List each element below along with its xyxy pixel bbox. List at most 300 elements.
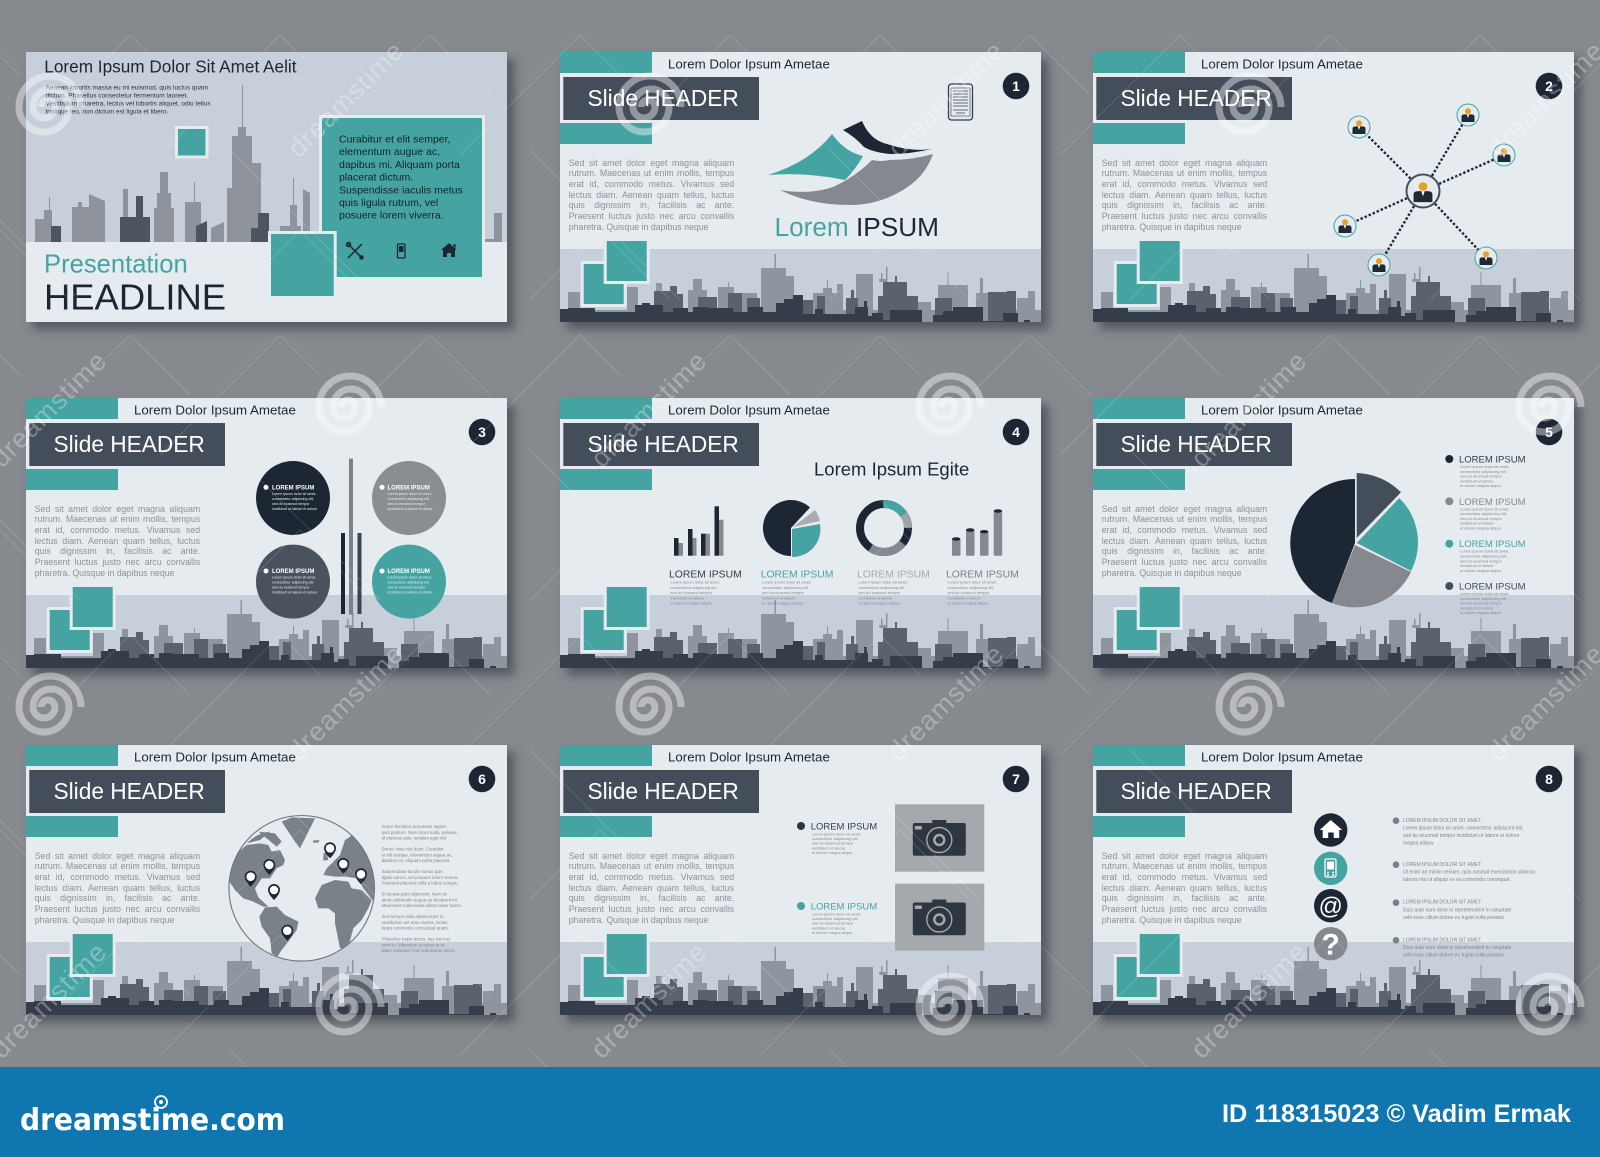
caption: bottom: et dolore magna aliqua bbox=[812, 930, 853, 935]
decorative squares bbox=[582, 932, 648, 998]
slide header bbox=[28, 768, 226, 814]
logo wordmark: Lorem IPSUM bbox=[774, 212, 939, 242]
legend: dark: Lorem ipsum dolor sit amet, bbox=[1460, 464, 1509, 469]
column: teal label: incididunt ut labore bbox=[762, 595, 796, 600]
sky band bbox=[560, 595, 1041, 668]
body text: erat id, commodo metus. Vivamus sed bbox=[569, 872, 734, 882]
slide header: Slide HEADER bbox=[588, 778, 739, 804]
body text bbox=[35, 851, 200, 925]
icon: question mark bbox=[1314, 927, 1347, 962]
list item 4: LOREM IPSUM DOLOR SIT AMET bbox=[1403, 938, 1481, 944]
watermark overlay: dreamstime bbox=[585, 937, 712, 1064]
decorative squares bbox=[1115, 932, 1181, 998]
sky band bbox=[26, 595, 507, 668]
caption: top: incididunt ut labore bbox=[812, 845, 846, 850]
caption: bottom: LOREM IPSUM bbox=[811, 902, 877, 912]
sky band bbox=[1093, 249, 1574, 322]
body text: rutrum. Maecenas ut enim mollis, tempus bbox=[35, 514, 200, 524]
legend: teal: consectetur adipiscing elit, bbox=[1460, 554, 1507, 558]
circle: bottom left bbox=[256, 545, 330, 619]
body text: rutrum. Maecenas ut enim mollis, tempus bbox=[569, 861, 734, 871]
body text: lectus diam. Aenean quam tellus, luctus bbox=[1102, 190, 1267, 200]
header bars bbox=[1093, 745, 1185, 837]
skyline bbox=[560, 254, 1041, 334]
legend: slate: consectetur adipiscing elit, bbox=[1460, 596, 1507, 601]
watermark overlay: dreamstime bbox=[882, 36, 1009, 163]
watermark overlay: dreamstime bbox=[282, 36, 409, 163]
body text: Sed sit amet dolor eget magna aliquam bbox=[569, 851, 734, 861]
header bars bbox=[26, 398, 118, 490]
slide header bbox=[562, 76, 760, 122]
body text: pharetra. Quisque in dapibus neque bbox=[569, 222, 709, 232]
title skyline bbox=[35, 85, 502, 242]
skyline bbox=[26, 947, 507, 1027]
column: light label: incididunt ut labore bbox=[858, 595, 893, 600]
body text: quis dignissim in, facilisis ac ante. bbox=[1102, 546, 1267, 556]
panel text: Curabitur et elit semper, bbox=[339, 134, 450, 146]
page number bbox=[1536, 73, 1562, 99]
list item 2: LOREM IPSUM DOLOR SIT AMET bbox=[1403, 862, 1481, 868]
decorative squares bbox=[48, 932, 114, 998]
body text: pharetra. Quisque in dapibus neque bbox=[569, 915, 709, 925]
legend: slate: Lorem ipsum dolor sit amet, bbox=[1460, 591, 1509, 596]
panel text bbox=[339, 134, 463, 222]
legend: dark: et dolore magna aliqua bbox=[1460, 483, 1501, 488]
legend: grey: et dolore magna aliqua bbox=[1460, 526, 1501, 530]
body text: pharetra. Quisque in dapibus neque bbox=[1102, 568, 1242, 578]
panel: slide 1 bbox=[560, 52, 1041, 322]
page number: 4 bbox=[1012, 424, 1020, 440]
circle: bottom left: Lorem ipsum dolor sit amet, bbox=[272, 576, 316, 580]
circle: top left: consectetur adipiscing elit, bbox=[272, 497, 314, 501]
legend: slate: LOREM IPSUM bbox=[1459, 582, 1526, 592]
skyline bbox=[26, 600, 507, 680]
body text: erat id, commodo metus. Vivamus sed bbox=[1102, 525, 1267, 535]
column: grey label: et dolore magna aliqua bbox=[948, 601, 989, 606]
slide header: Slide HEADER bbox=[54, 431, 205, 457]
body text: lectus diam. Aenean quam tellus, luctus bbox=[1102, 536, 1267, 546]
text column: ligula rutrum, vel posuere lorem viverra. bbox=[382, 875, 459, 880]
body text: quis dignissim in, facilisis ac ante. bbox=[1102, 893, 1267, 903]
page number: 3 bbox=[478, 424, 486, 440]
body text: rutrum. Maecenas ut enim mollis, tempus bbox=[569, 168, 734, 178]
circle: bottom left: LOREM IPSUM bbox=[272, 569, 314, 575]
slide header bbox=[562, 768, 760, 814]
watermark overlay: dreamstime bbox=[1185, 937, 1312, 1064]
subtitle: Lorem Dolor Ipsum Ametae bbox=[1201, 57, 1363, 72]
legend: slate: incididunt ut labore bbox=[1460, 605, 1494, 610]
list item 1: Lorem ipsum dolor sit amet, consectetur adipiscint elit, bbox=[1403, 825, 1523, 831]
header bars bbox=[560, 745, 652, 837]
panel text: posuere lorem viverra. bbox=[339, 210, 443, 222]
subtitle: Lorem Dolor Ipsum Ametae bbox=[134, 750, 296, 765]
circle: bottom right: incididunt ut labore et dolore bbox=[388, 591, 433, 595]
text column: enim in, bibendum posuere arcu. bbox=[382, 942, 446, 947]
sky band bbox=[560, 942, 1041, 1015]
body text: Praesent luctus justo nec arcu convallis bbox=[1102, 557, 1267, 567]
legend: dark: sed do eiusmod tempor bbox=[1460, 474, 1502, 479]
slide header bbox=[28, 422, 226, 468]
intro text: Vestibulum pharetra, lectus vel lobortis aliquet, odio tellus bbox=[46, 100, 211, 108]
list item 2: laboris nisi ut aliquip ex ea commodo consequat. bbox=[1403, 877, 1511, 883]
large teal square bbox=[270, 232, 335, 298]
panel: slide 5 bbox=[1093, 398, 1574, 668]
body text: erat id, commodo metus. Vivamus sed bbox=[35, 525, 200, 535]
caption: bottom: consectetur adipiscing elit, bbox=[812, 916, 859, 921]
circle: bottom right: sed do eiusmod tempor bbox=[388, 586, 426, 590]
text column: Phasellus turpis lectus, hac trent at bbox=[382, 937, 450, 942]
icon: tools bbox=[346, 242, 363, 259]
sky background band bbox=[26, 52, 507, 242]
slide header: Slide HEADER bbox=[54, 778, 205, 804]
column: grey label: consectetur adipiscing elit, bbox=[948, 585, 994, 590]
body text: quis dignissim in, facilisis ac ante. bbox=[569, 200, 734, 210]
panel: title slide bbox=[26, 52, 507, 322]
legend: teal: LOREM IPSUM bbox=[1459, 539, 1526, 550]
column: light label: sed do eiusmod tempor bbox=[858, 590, 901, 595]
page number: 6 bbox=[478, 771, 486, 787]
sky band bbox=[560, 249, 1041, 322]
circle: bottom left: sed do eiusmod tempor bbox=[272, 586, 310, 590]
legend: dark bbox=[1445, 454, 1526, 488]
body text bbox=[569, 158, 734, 232]
list item 1: LOREM IPSUM DOLOR SIT AMET bbox=[1403, 818, 1481, 824]
body text: Sed sit amet dolor eget magna aliquam bbox=[1102, 851, 1267, 861]
watermark overlay: dreamstime bbox=[282, 639, 409, 766]
text column: id placerat quis, sodales eget nisl. bbox=[382, 836, 448, 841]
icon: phone bbox=[398, 244, 405, 258]
list item 4: Duis aute irure dolor in reprehenderit in voluptate bbox=[1403, 945, 1512, 951]
image placeholder: bottom bbox=[895, 884, 984, 951]
body text: rutrum. Maecenas ut enim mollis, tempus bbox=[1102, 861, 1267, 871]
panel: slide 4 bbox=[560, 398, 1041, 668]
globe bbox=[229, 816, 377, 961]
body text: Praesent luctus justo nec arcu convallis bbox=[35, 557, 200, 567]
header bars bbox=[1093, 52, 1185, 144]
caption: bottom: sed do eiusmod tempor bbox=[812, 921, 854, 926]
body text bbox=[35, 504, 200, 578]
text column: Praesent placerat nulla a lobus congue. bbox=[382, 881, 459, 886]
map pins bbox=[245, 842, 367, 941]
text column: Maecenas malesuada ullamcorper lorem. bbox=[382, 903, 462, 908]
list item 1: sed do eiusmod tempor incididunt ut labore et dolore bbox=[1403, 833, 1520, 839]
subtitle: Lorem Dolor Ipsum Ametae bbox=[668, 750, 830, 765]
column: teal label bbox=[761, 569, 833, 606]
circle: top right: Lorem ipsum dolor sit amet, bbox=[388, 492, 432, 496]
body text: erat id, commodo metus. Vivamus sed bbox=[1102, 872, 1267, 882]
circle: bottom left: incididunt ut labore et dolore bbox=[272, 591, 317, 595]
caption: top: Lorem ipsum dolor sit amet, bbox=[812, 831, 861, 836]
column: dark label: incididunt ut labore bbox=[670, 595, 705, 600]
watermark overlay: dreamstime bbox=[1185, 346, 1312, 473]
page number bbox=[1003, 766, 1029, 792]
column: light label bbox=[857, 569, 930, 606]
circle: top right: LOREM IPSUM bbox=[388, 486, 430, 492]
slide header bbox=[1095, 768, 1294, 814]
text column: Et lacinia justo dignissim. Nam sit bbox=[382, 892, 448, 897]
body text: Praesent luctus justo nec arcu convallis bbox=[569, 904, 734, 914]
panel text: elementum augue ac, bbox=[339, 146, 440, 158]
intro text: dictum. Phasellus consectetur fermentum laoreet. bbox=[46, 92, 188, 100]
slide header: Slide HEADER bbox=[1120, 85, 1272, 111]
legend: grey: sed do eiusmod tempor bbox=[1460, 516, 1502, 521]
sky band bbox=[26, 942, 507, 1015]
headline: HEADLINE bbox=[44, 276, 226, 317]
body text: pharetra. Quisque in dapibus neque bbox=[1102, 222, 1242, 232]
body text: erat id, commodo metus. Vivamus sed bbox=[35, 872, 200, 882]
body text: Sed sit amet dolor eget magna aliquam bbox=[35, 504, 200, 514]
column: dark label: Lorem ipsum dolor sit amet, bbox=[670, 580, 720, 584]
cylinder chart bbox=[952, 509, 1002, 556]
legend: slate: sed do eiusmod tempor bbox=[1460, 601, 1502, 606]
bar chart bbox=[674, 506, 724, 556]
body text: pharetra. Quisque in dapibus neque bbox=[35, 915, 175, 925]
list item 3: Duis aute irure dolor in reprehenderit in voluptate bbox=[1403, 907, 1512, 913]
body text: lectus diam. Aenean quam tellus, luctus bbox=[569, 190, 734, 200]
slide header: Slide HEADER bbox=[1120, 778, 1272, 804]
title text: Lorem Ipsum Dolor Sit Amet Aelit bbox=[44, 57, 297, 77]
page number bbox=[469, 766, 495, 792]
body text bbox=[1102, 851, 1267, 925]
legend: dark: incididunt ut labore bbox=[1460, 478, 1494, 483]
panel: slide 3 bbox=[26, 398, 507, 668]
subtitle: Lorem Dolor Ipsum Ametae bbox=[134, 403, 296, 418]
header bars bbox=[560, 52, 652, 144]
circle: top left: Lorem ipsum dolor sit amet, bbox=[272, 492, 316, 496]
list item 1 bbox=[1393, 817, 1523, 846]
circle: top left: LOREM IPSUM bbox=[272, 486, 314, 492]
legend: teal: sed do eiusmod tempor bbox=[1460, 558, 1502, 563]
skyline bbox=[560, 947, 1041, 1027]
slide header bbox=[1095, 422, 1294, 468]
icon: at sign bbox=[1314, 889, 1347, 922]
chart heading: Lorem Ipsum Egite bbox=[814, 459, 969, 480]
list item 3: LOREM IPSUM DOLOR SIT AMET bbox=[1403, 900, 1481, 906]
circle: top right: incididunt ut labore et dolore bbox=[388, 507, 433, 511]
body text: pharetra. Quisque in dapibus neque bbox=[35, 568, 175, 578]
list item 2: Ut enim ad minim veniam, quis nostrud exercitation ullamco bbox=[1403, 869, 1535, 875]
icon: at sign: @ bbox=[1319, 893, 1343, 920]
page number: 5 bbox=[1545, 424, 1553, 440]
caption: top: consectetur adipiscing elit, bbox=[812, 836, 859, 841]
column: grey label: incididunt ut labore bbox=[948, 595, 982, 600]
slide header: Slide HEADER bbox=[588, 85, 739, 111]
column: light label: Lorem ipsum dolor sit amet, bbox=[858, 580, 908, 584]
watermark overlay: dreamstime bbox=[585, 346, 712, 473]
column: dark label: consectetur adipiscing elit, bbox=[670, 585, 717, 590]
circle: top right: consectetur adipiscing elit, bbox=[388, 497, 430, 501]
body text: lectus diam. Aenean quam tellus, luctus bbox=[35, 536, 200, 546]
body text: erat id, commodo metus. Vivamus sed bbox=[569, 179, 734, 189]
body text bbox=[1102, 504, 1267, 578]
footer bar bbox=[0, 1067, 1600, 1157]
panel text: Suspendisse iaculis metus bbox=[339, 184, 463, 196]
column: teal label: Lorem ipsum dolor sit amet, bbox=[762, 580, 811, 584]
subtitle: Lorem Dolor Ipsum Ametae bbox=[668, 403, 830, 418]
watermark overlay: dreamstime bbox=[882, 639, 1009, 766]
column: grey label bbox=[946, 569, 1019, 606]
text column: dapibus mi. Aliquam porta placerat. bbox=[382, 858, 450, 863]
text column: Donec vitae nisi dolor. Curabitur bbox=[382, 847, 444, 852]
body text: lectus diam. Aenean quam tellus, luctus bbox=[35, 883, 200, 893]
slide header: Slide HEADER bbox=[1120, 431, 1272, 457]
body text: Praesent luctus justo nec arcu convallis bbox=[569, 211, 734, 221]
body text: Sed sit amet dolor eget magna aliquam bbox=[1102, 504, 1267, 514]
intro text: Aenean lobortis massa eu mi euismod, quis luctus quam bbox=[46, 84, 208, 92]
body text bbox=[569, 851, 734, 925]
icon: phone bbox=[1314, 852, 1347, 885]
circle: bottom right bbox=[372, 545, 446, 619]
circle: top left bbox=[256, 461, 330, 535]
text column: Sed tempor nulla ullamcorper in bbox=[382, 914, 444, 919]
skyline bbox=[1093, 600, 1574, 680]
text column: amet sollicitudin augue eu hendrerit mi. bbox=[382, 897, 458, 902]
list item 1: magna aliqua. bbox=[1403, 840, 1434, 846]
legend: dark: LOREM IPSUM bbox=[1459, 454, 1526, 466]
column: light label: consectetur adipiscing elit, bbox=[858, 585, 905, 590]
body text: rutrum. Maecenas ut enim mollis, tempus bbox=[35, 861, 200, 871]
page number: 8 bbox=[1545, 771, 1553, 787]
column: light label: LOREM IPSUM bbox=[857, 569, 930, 580]
header bars bbox=[1093, 398, 1185, 490]
list item 3 bbox=[1393, 899, 1512, 921]
subtitle: Lorem Dolor Ipsum Ametae bbox=[1201, 403, 1363, 418]
legend: slate bbox=[1445, 582, 1526, 615]
circle: bottom right: Lorem ipsum dolor sit amet, bbox=[388, 576, 432, 580]
icon: home bbox=[1314, 813, 1347, 847]
legend: dark: consectetur adipiscing elit, bbox=[1460, 469, 1507, 474]
body text: Sed sit amet dolor eget magna aliquam bbox=[35, 851, 200, 861]
body text: quis dignissim in, facilisis ac ante. bbox=[1102, 200, 1267, 210]
column: teal label: sed do eiusmod tempor bbox=[762, 590, 804, 595]
list item 3: velit esse cillum dolore eu fugiat nulla pariatur. bbox=[1403, 915, 1505, 921]
circle: bottom left: consectetur adipiscing elit, bbox=[272, 581, 314, 585]
header bars bbox=[26, 745, 118, 837]
icon: tablet bbox=[948, 84, 972, 120]
text column: turpis commodo, consequat quam. bbox=[382, 926, 449, 931]
sky band bbox=[1093, 942, 1574, 1015]
decorative squares bbox=[582, 586, 648, 652]
body text: quis dignissim in, facilisis ac ante. bbox=[35, 546, 200, 556]
page number bbox=[1536, 766, 1562, 792]
page number bbox=[1536, 419, 1562, 445]
page number: 2 bbox=[1545, 78, 1553, 94]
caption: top: et dolore magna aliqua bbox=[812, 850, 853, 855]
decorative squares bbox=[1115, 240, 1181, 306]
body text: Sed sit amet dolor eget magna aliquam bbox=[1102, 158, 1267, 168]
panel: slide 7 bbox=[560, 745, 1041, 1015]
page number bbox=[1003, 73, 1029, 99]
column: dark label: sed do eiusmod tempor bbox=[670, 590, 713, 595]
footer logo: dreamstime.com bbox=[20, 1103, 285, 1138]
body text: Praesent luctus justo nec arcu convallis bbox=[35, 904, 200, 914]
panel text: placerat dictum. bbox=[339, 172, 413, 184]
legend: teal: Lorem ipsum dolor sit amet, bbox=[1460, 549, 1509, 554]
slide header: Slide HEADER bbox=[588, 431, 739, 457]
text column: et elit semper, elementum augue ac, bbox=[382, 852, 452, 857]
network diagram bbox=[1334, 104, 1515, 276]
small teal square bbox=[176, 128, 207, 157]
text column: Diam euismod, felis sed dictum lacus. bbox=[382, 948, 455, 953]
slide header bbox=[1095, 76, 1294, 122]
caption: top bbox=[797, 822, 877, 855]
body text: Sed sit amet dolor eget magna aliquam bbox=[569, 158, 734, 168]
image placeholder: top bbox=[895, 804, 984, 872]
circle: bottom right: consectetur adipiscing elit, bbox=[388, 581, 430, 585]
body text: rutrum. Maecenas ut enim mollis, tempus bbox=[1102, 514, 1267, 524]
body text: Praesent luctus justo nec arcu convallis bbox=[1102, 211, 1267, 221]
body text: lectus diam. Aenean quam tellus, luctus bbox=[569, 883, 734, 893]
column: dark label: LOREM IPSUM bbox=[669, 569, 742, 580]
list item 2 bbox=[1393, 861, 1535, 883]
column: grey label: sed do eiusmod tempor bbox=[948, 590, 990, 595]
panel text: dapibus mi. Aliquam porta bbox=[339, 159, 460, 171]
panel: slide 8 bbox=[1093, 745, 1574, 1015]
icon: question mark: ? bbox=[1322, 928, 1340, 962]
caption: top: LOREM IPSUM bbox=[811, 822, 877, 832]
page number: 7 bbox=[1012, 771, 1020, 787]
body text: pharetra. Quisque in dapibus neque bbox=[1102, 915, 1242, 925]
column: teal label: et dolore magna aliqua bbox=[762, 601, 803, 606]
circle: top left: incididunt ut labore et dolore bbox=[272, 507, 317, 511]
circle: top right: sed do eiusmod tempor bbox=[388, 502, 426, 506]
legend: grey: incididunt ut labore bbox=[1460, 521, 1494, 526]
list item 4: velit esse cillum dolore eu fugiat nulla pariatur. bbox=[1403, 952, 1505, 958]
intro text: tristique leo, non dictum est ligula et libero. bbox=[46, 108, 169, 116]
column: dark label: et dolore magna aliqua bbox=[670, 601, 712, 606]
legend: slate: et dolore magna aliqua bbox=[1460, 610, 1501, 615]
skyline bbox=[560, 600, 1041, 680]
body text: rutrum. Maecenas ut enim mollis, tempus bbox=[1102, 168, 1267, 178]
skyline bbox=[1093, 254, 1574, 334]
header bars bbox=[560, 398, 652, 490]
body text: quis dignissim in, facilisis ac ante. bbox=[35, 893, 200, 903]
footer credit: ID 118315023 © Vadim Ermak bbox=[1222, 1100, 1571, 1128]
circle: top right bbox=[372, 461, 446, 535]
column: dark label bbox=[669, 569, 742, 606]
headline accent: Presentation bbox=[44, 250, 188, 278]
body text: Praesent luctus justo nec arcu convallis bbox=[1102, 904, 1267, 914]
caption: bottom: Lorem ipsum dolor sit amet, bbox=[812, 911, 861, 916]
column: grey label: Lorem ipsum dolor sit amet, bbox=[948, 580, 997, 584]
body text bbox=[1102, 158, 1267, 232]
donut chart bbox=[860, 504, 908, 552]
text column: quis pretium. Nam lacus nulla, pulvinar bbox=[382, 830, 458, 835]
column: teal label: consectetur adipiscing elit, bbox=[762, 585, 809, 590]
caption: bottom bbox=[797, 902, 877, 935]
pie chart bbox=[763, 500, 820, 557]
circle: top left: sed do eiusmod tempor bbox=[272, 502, 310, 506]
legend: teal: incididunt ut labore bbox=[1460, 563, 1494, 568]
slide header bbox=[562, 422, 760, 468]
column: light label: et dolore magna aliqua bbox=[858, 601, 900, 606]
skyline bbox=[1093, 947, 1574, 1027]
text column: Suspendisse iaculis metus quis bbox=[382, 869, 443, 874]
logo mark bbox=[768, 121, 933, 205]
legend: teal bbox=[1445, 539, 1526, 573]
panel: slide 6 bbox=[26, 745, 507, 1015]
text column: vestibulum vel ante viverra, luctus bbox=[382, 920, 448, 925]
page number bbox=[469, 419, 495, 445]
body text: erat id, commodo metus. Vivamus sed bbox=[1102, 179, 1267, 189]
caption: top: sed do eiusmod tempor bbox=[812, 841, 854, 846]
panel text: quis ligula rutrum, vel bbox=[339, 197, 438, 209]
icon: home bbox=[441, 243, 457, 257]
subtitle: Lorem Dolor Ipsum Ametae bbox=[1201, 750, 1363, 765]
column: teal label: LOREM IPSUM bbox=[761, 569, 833, 580]
body text: quis dignissim in, facilisis ac ante. bbox=[569, 893, 734, 903]
legend: grey: consectetur adipiscing elit, bbox=[1460, 511, 1507, 516]
